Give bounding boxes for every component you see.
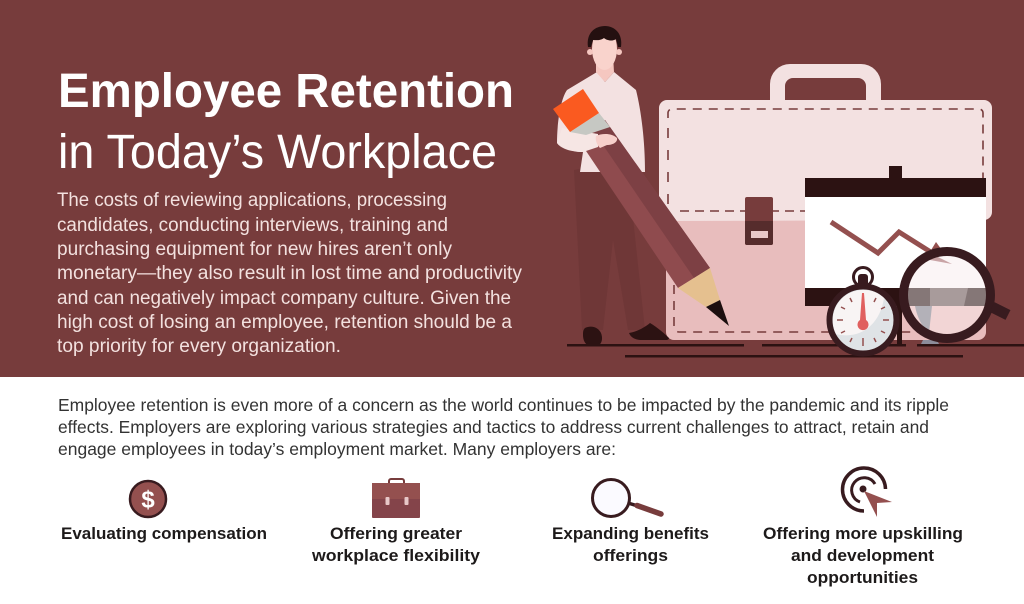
item: benefits offerings: Expanding benefits xyxy=(552,524,709,543)
title: in Today’s Workplace xyxy=(58,126,497,179)
icon: dollar coin: $ xyxy=(141,486,155,514)
illustration: chart board xyxy=(805,166,986,345)
needle xyxy=(858,293,868,330)
icon: dollar coin xyxy=(130,481,166,517)
item: workplace flexibility: workplace flexibility xyxy=(311,546,481,565)
item: evaluating compensation: Evaluating compensation xyxy=(61,524,267,543)
neck and head xyxy=(596,55,614,82)
lower intro paragraph: effects. Employers are exploring various strategies and tactics to address current challenges to attract, retain and xyxy=(58,417,929,437)
illustration: pencil xyxy=(553,89,729,326)
intro paragraph: and can negatively impact company culture. Given the xyxy=(57,288,511,309)
intro paragraph: monetary—they also result in lost time and productivity xyxy=(57,263,522,284)
trousers xyxy=(574,165,645,330)
illustration: stopwatch xyxy=(830,268,896,354)
item: workplace flexibility: Offering greater xyxy=(330,524,462,543)
illustration: ground lines xyxy=(567,344,1024,358)
shirt xyxy=(557,72,645,172)
item: upskilling: Offering more upskilling xyxy=(763,524,963,543)
intro paragraph: high cost of losing an employee, retention should be a xyxy=(57,312,512,333)
hair xyxy=(588,26,621,47)
intro paragraph: candidates, conducting interviews, training and xyxy=(57,215,448,236)
icon: magnifying glass xyxy=(592,480,661,516)
item: benefits offerings: offerings xyxy=(593,546,668,565)
illustration: briefcase xyxy=(659,64,992,340)
item: benefits offerings xyxy=(552,480,709,565)
item: upskilling: opportunities xyxy=(807,568,918,587)
clasp xyxy=(745,197,773,245)
icon: briefcase xyxy=(372,479,420,518)
illustration: man xyxy=(557,26,669,345)
item: upskilling xyxy=(763,468,963,587)
downward trend line xyxy=(831,222,937,256)
title xyxy=(58,65,514,179)
header panel background xyxy=(0,0,1024,377)
intro paragraph: purchasing equipment for new hires aren’t only xyxy=(57,239,452,260)
intro paragraph: The costs of reviewing applications, processing xyxy=(57,190,447,211)
item: workplace flexibility xyxy=(311,479,481,565)
lower intro paragraph xyxy=(58,395,949,459)
lower intro paragraph: Employee retention is even more of a concern as the world continues to be impacted by the pandemic and its ripple xyxy=(58,395,949,415)
item: evaluating compensation xyxy=(61,481,267,543)
intro paragraph xyxy=(57,190,522,357)
illustration: magnifying glass xyxy=(903,251,1008,344)
lower intro paragraph: engage employees in today’s employment market. Many employers are: xyxy=(58,439,616,459)
title: Employee Retention xyxy=(58,65,514,118)
shoes xyxy=(583,327,602,345)
item: upskilling: and development xyxy=(791,546,934,565)
intro paragraph: top priority for every organization. xyxy=(57,336,341,357)
icon: target with arrow xyxy=(843,468,892,517)
